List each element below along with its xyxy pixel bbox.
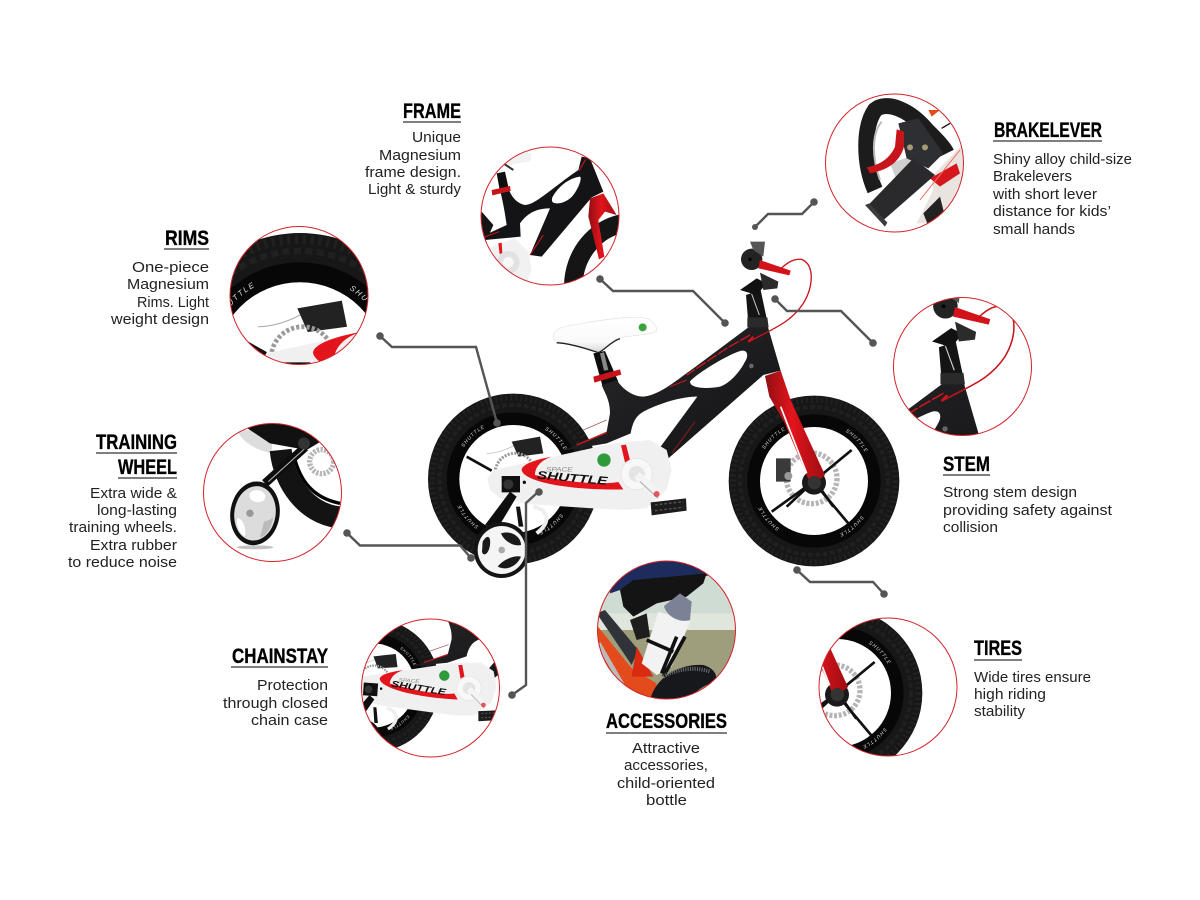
heading: tires: TIRES — [974, 637, 1022, 660]
fork — [765, 371, 825, 487]
callout: accessories — [606, 710, 727, 809]
heading: accessories: ACCESSORIES — [606, 710, 727, 733]
saddle — [553, 317, 657, 353]
text: stem description — [943, 485, 1112, 536]
central bicycle — [428, 242, 899, 578]
heading: training wheel: TRAINING — [96, 431, 177, 454]
connector lines — [343, 198, 888, 699]
text: chainstay description: chain case — [251, 713, 328, 729]
text: frame description — [365, 130, 462, 198]
chain guard: SPACE — [546, 467, 573, 474]
photo circle: rims — [230, 94, 959, 365]
photo circle: brake lever — [823, 93, 967, 237]
text: tires description: stability — [974, 704, 1026, 720]
seat clamp — [593, 369, 621, 383]
photo circle: accessories — [597, 560, 737, 703]
text: accessories description: accessories, — [624, 758, 708, 774]
frame accents — [577, 335, 753, 453]
text: training wheel description — [68, 486, 177, 571]
text: chainstay description: through closed — [223, 696, 328, 712]
text: stem description: Strong stem design — [943, 485, 1077, 501]
heading: chainstay: CHAINSTAY — [232, 645, 328, 668]
connector: frame — [596, 275, 729, 327]
connector: brakelever — [752, 198, 818, 230]
heading: training wheel: WHEEL — [118, 456, 177, 479]
text: stem description: providing safety against — [943, 503, 1112, 519]
callout: tires — [974, 637, 1091, 720]
text: brakelever description: Shiny alloy child-size — [993, 152, 1132, 168]
saddle post — [593, 351, 618, 387]
heading: stem: STEM — [943, 453, 990, 476]
chain guard: SHUTTLE — [536, 470, 608, 488]
photo circle: frame — [480, 145, 623, 287]
text: brakelever description — [992, 152, 1132, 238]
photo circle: chainstay — [301, 496, 686, 784]
callout: stem — [943, 453, 1112, 536]
photo circle: training wheel — [200, 420, 343, 563]
connector: stem — [771, 295, 877, 347]
text: rims description: Magnesium — [127, 277, 209, 293]
text: tires description: Wide tires ensure — [974, 670, 1091, 686]
text: training wheel description: Extra rubber — [90, 538, 177, 554]
text: training wheel description: to reduce noise — [68, 555, 177, 571]
text: tires description — [974, 670, 1091, 720]
frame — [563, 323, 781, 458]
text: rims description — [110, 260, 209, 328]
text: accessories description: child-oriented — [617, 776, 715, 792]
callout: rims — [110, 227, 209, 328]
rear wheel — [428, 394, 599, 564]
rear brake and chain — [467, 437, 543, 493]
text: frame description: frame design. — [365, 165, 461, 181]
text: tires description: high riding — [974, 687, 1046, 703]
text: chainstay description: Protection — [257, 678, 328, 694]
text: rims description: weight design — [110, 312, 209, 328]
training wheel — [474, 476, 546, 578]
stem and handlebar — [740, 242, 791, 327]
photo circle: stem — [830, 94, 1032, 436]
brake cable — [748, 259, 811, 342]
callout: frame — [365, 100, 462, 198]
connector: training wheel — [343, 529, 475, 562]
callout: training wheel — [68, 431, 177, 571]
heading: frame: FRAME — [403, 100, 461, 123]
connector: chainstay — [508, 488, 543, 699]
text: accessories description: bottle — [646, 793, 687, 809]
pedal — [651, 498, 687, 515]
heading: rims: RIMS — [165, 227, 209, 250]
text: brakelever description: Brakelevers — [993, 169, 1072, 185]
callout: brake lever — [992, 119, 1132, 238]
text: rims description: Rims. Light — [137, 295, 209, 311]
text: accessories description: Attractive — [632, 741, 700, 757]
callout: chainstay — [223, 645, 328, 729]
text: brakelever description: small hands — [993, 222, 1075, 238]
connector: tires — [793, 566, 888, 598]
photo circle: tires — [818, 94, 959, 756]
text: chainstay description — [223, 678, 328, 729]
text: brakelever description: distance for kids’ — [993, 204, 1111, 220]
text: training wheel description: long-lasting — [97, 503, 177, 519]
front wheel — [729, 396, 899, 566]
text: brakelever description: with short lever — [992, 187, 1097, 203]
text: rims description: One-piece — [132, 260, 209, 276]
text: training wheel description: Extra wide & — [90, 486, 177, 502]
heading: brakelever: BRAKELEVER — [994, 119, 1102, 142]
text: frame description: Light & sturdy — [368, 182, 462, 198]
text: frame description: Magnesium — [379, 148, 461, 164]
text: training wheel description: training wheels. — [69, 520, 177, 536]
text: frame description: Unique — [412, 130, 461, 146]
connector: rims — [376, 332, 501, 427]
heading: training wheel — [96, 431, 177, 479]
text: stem description: collision — [943, 520, 998, 536]
text: accessories description — [617, 741, 715, 809]
chain guard — [487, 440, 672, 510]
